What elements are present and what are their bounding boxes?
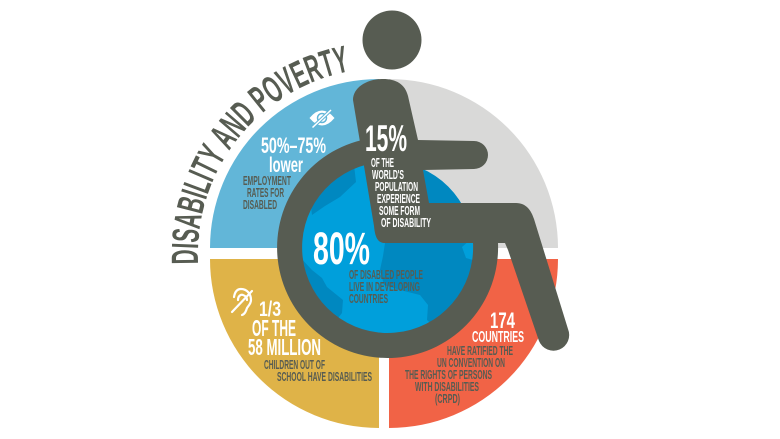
population stat description: OF THE — [371, 156, 394, 170]
countries stat description — [405, 344, 513, 406]
employment label: lower — [269, 154, 303, 177]
wheelchair figure — [277, 10, 569, 358]
population stat figure: 15% — [365, 118, 407, 159]
panel: countries — [389, 259, 558, 428]
countries stat figure: COUNTRIES — [472, 329, 524, 346]
employment description — [243, 174, 291, 212]
countries stat description: (CRPD) — [435, 392, 460, 406]
title: DISABILITY AND POVERTY — [172, 46, 345, 264]
panel: employment — [210, 79, 379, 248]
countries stat description: THE RIGHTS OF PERSONS — [405, 368, 492, 382]
employment description: DISABLED — [243, 198, 277, 212]
population stat description — [371, 156, 431, 230]
globe stat description: COUNTRIES — [349, 292, 388, 306]
body — [353, 79, 569, 351]
children stat figure: 58 MILLION — [248, 334, 321, 360]
wheel ring — [277, 138, 498, 358]
countries stat figure: 174 — [490, 308, 516, 333]
globe stat description: OF DISABLED PEOPLE — [349, 268, 423, 282]
icon: crossed ear — [232, 289, 252, 315]
children stat figure: OF THE — [252, 315, 296, 341]
population stat description: POPULATION — [375, 180, 418, 194]
children stat figure: 1/3 — [259, 298, 281, 321]
countries stat description: UN CONVENTION ON — [437, 356, 505, 370]
children stat description — [264, 358, 372, 384]
globe stat figure: 80% — [313, 223, 370, 274]
countries stat figure — [472, 308, 524, 346]
population stat description: WORLD'S — [372, 168, 404, 182]
countries stat description: WITH DISABILITIES — [415, 380, 479, 394]
children stat description: CHILDREN OUT OF — [264, 358, 325, 372]
population stat description: EXPERIENCE — [377, 192, 420, 206]
employment description: RATES FOR — [247, 186, 284, 200]
icon: crossed eye — [310, 110, 334, 128]
countries stat description: HAVE RATIFIED THE — [447, 344, 513, 358]
globe — [302, 165, 474, 333]
icon: head — [362, 10, 422, 70]
globe stat description — [349, 268, 423, 306]
children stat figure — [248, 298, 321, 360]
panel: children out of school — [210, 259, 379, 428]
globe stat description: LIVE IN DEVELOPING — [349, 280, 420, 294]
panel: grey quadrant — [389, 79, 558, 248]
employment description: EMPLOYMENT — [243, 174, 291, 188]
population stat description: OF DISABILITY — [381, 216, 431, 230]
population stat description: SOME FORM — [379, 204, 420, 218]
employment figure: 50%–75% — [261, 133, 326, 158]
children stat description: SCHOOL HAVE DISABILITIES — [277, 370, 372, 384]
